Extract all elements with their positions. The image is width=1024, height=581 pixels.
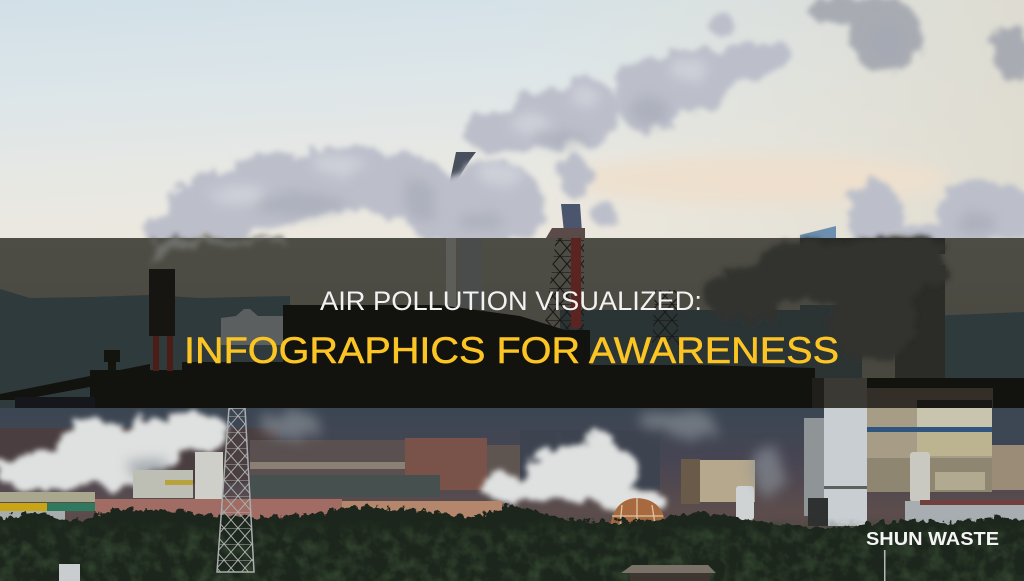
title line 1: AIR POLLUTION VISUALIZED:: [320, 286, 702, 316]
steam clouds: [0, 412, 666, 510]
lattice tower: [543, 238, 584, 340]
tree foliage texture: [0, 518, 1024, 581]
upper plume: [463, 13, 791, 154]
right low clouds: [848, 178, 1024, 249]
tan wall: [342, 501, 502, 521]
signal mast: [104, 350, 120, 372]
power station blocks: [800, 238, 945, 383]
center stacks: [446, 238, 482, 308]
beige block: [700, 460, 755, 502]
white tower: [804, 408, 867, 526]
white tower shadow: [812, 378, 993, 408]
left plume remnant: [152, 238, 285, 270]
drifting puffs: [559, 156, 617, 226]
left tanks and machinery: [133, 452, 223, 499]
tree line: [0, 505, 1024, 581]
low yellow and green shed: [0, 492, 95, 521]
dark blue tank: [520, 430, 660, 490]
warm sky tint at right: [0, 0, 1024, 240]
lower section of scene: [0, 408, 1024, 581]
blue rooftop at right: [800, 226, 836, 240]
pink wall: [95, 499, 342, 520]
small building with roof: [621, 565, 716, 581]
lattice pylon: [217, 408, 254, 572]
white sign post: [59, 564, 80, 581]
left chimney: [149, 269, 175, 371]
left plume: [144, 145, 545, 250]
thin tower: [652, 290, 679, 345]
dark smoke: [705, 238, 948, 362]
dome: [610, 498, 665, 528]
main factory silhouette: [90, 305, 1024, 408]
watermark: SHUN WASTE: [866, 528, 999, 549]
pipes: [250, 462, 405, 469]
smoke shadows: [250, 22, 997, 232]
factory mid-ground: [0, 428, 755, 504]
dark title band: [0, 238, 1024, 408]
right beige building: [867, 408, 1024, 492]
smoke highlights: [212, 61, 710, 205]
warm sky glow: [570, 156, 950, 204]
distant hills: [0, 289, 290, 408]
grey vent block: [221, 309, 285, 345]
smoke plumes in the sky: [144, 0, 1024, 250]
brown block: [405, 438, 487, 490]
sky background: [0, 0, 1024, 240]
lamp post: [884, 550, 886, 581]
conveyor base: [15, 397, 95, 408]
blue stack at center: [546, 204, 585, 238]
conveyor: [0, 364, 150, 400]
top right clouds: [807, 0, 1024, 82]
white cylinder and annex: [736, 452, 1024, 525]
title line 2: INFOGRAPHICS FOR AWARENESS: [184, 329, 839, 371]
chimney tip above plume: [449, 152, 476, 192]
